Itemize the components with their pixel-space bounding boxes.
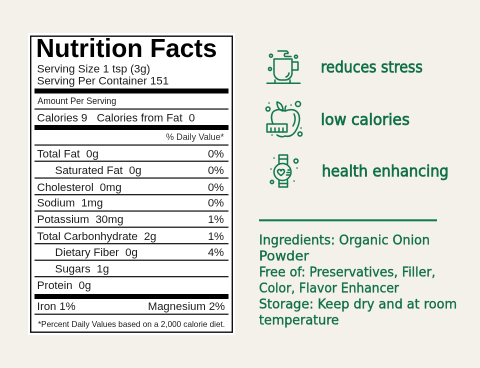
nutrient rows: 0% — [208, 182, 224, 194]
amount per serving: Amount Per Serving — [38, 96, 116, 106]
nutrient rows: Sodium 1mg — [37, 198, 103, 210]
vitamins and minerals row — [37, 301, 225, 313]
divider line — [259, 219, 437, 221]
nutrient rows: 0% — [208, 198, 224, 210]
product details text: Storage: Keep dry and at room — [259, 296, 457, 312]
product details text: Free of: Preservatives, Filler, — [259, 264, 436, 280]
nutrient rows: 4% — [208, 247, 224, 259]
vitamins and minerals row: Iron 1% — [37, 301, 76, 313]
icon: smartwatch — [270, 155, 298, 187]
nutrient rows: Dietary Fiber 0g — [55, 247, 138, 259]
nutrient rows — [37, 149, 224, 292]
product details text — [259, 232, 457, 328]
serving information — [37, 63, 169, 87]
icon: apple with ruler — [266, 102, 302, 137]
daily value heading: % Daily Value* — [166, 132, 225, 142]
nutrient rows: Total Carbonhydrate 2g — [37, 231, 156, 243]
product details text: Ingredients: Organic Onion — [259, 232, 430, 248]
icon: coffee cup — [267, 51, 300, 83]
calories row: Calories 9 Calories from Fat 0 — [37, 113, 195, 125]
nutrient rows: Cholesterol 0mg — [37, 182, 122, 194]
nutrient rows: 1% — [208, 231, 224, 243]
nutrient rows: 0% — [208, 165, 224, 177]
text: low calories: low calories — [321, 110, 410, 129]
vitamins and minerals row: Magnesium 2% — [148, 301, 225, 313]
nutrient rows: Saturated Fat 0g — [55, 165, 141, 177]
product details text: temperature — [259, 312, 339, 328]
serving information: Serving Size 1 tsp (3g) — [37, 63, 150, 75]
nutrient rows: 1% — [208, 214, 224, 226]
nutrient rows: Potassium 30mg — [37, 214, 123, 226]
nutrient rows: Protein 0g — [37, 280, 91, 292]
title: Nutrition Facts — [36, 33, 217, 63]
nutrition facts label panel — [28, 33, 235, 335]
product details text: Powder — [259, 248, 309, 264]
nutrient rows: Total Fat 0g — [37, 149, 99, 161]
nutrient rows: 0% — [208, 149, 224, 161]
serving information: Serving Per Container 151 — [37, 75, 169, 87]
nutrient rows: Sugars 1g — [55, 264, 109, 276]
text: reduces stress: reduces stress — [321, 58, 423, 77]
text: health enhancing: health enhancing — [322, 162, 449, 181]
product details text: Color, Flavor Enhancer — [259, 280, 399, 296]
footnote: *Percent Daily Values based on a 2,000 calorie diet. — [38, 319, 225, 329]
